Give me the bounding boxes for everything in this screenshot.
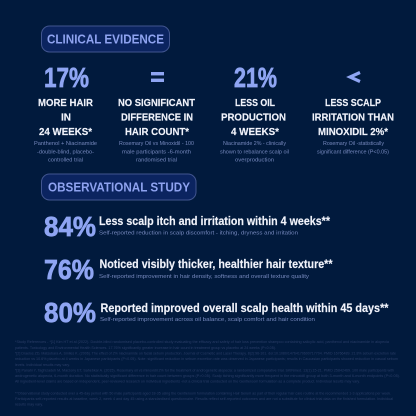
stat row: 84%: Self-reported reduction in scalp discomfort - itching, dryness and irritation xyxy=(99,231,298,237)
footnotes: study references xyxy=(15,340,400,406)
footnotes: study references: patients. Toxicology and Environmental Health Sciences. 17.76% significantly greater increase in hair count in treatment group vs placebo at 24 weeks (P<0.05). xyxy=(15,346,276,350)
stat: 21% less oil: LESS OIL xyxy=(235,98,275,109)
stat: equal hair count: HAIR COUNT* xyxy=(125,127,189,138)
footnotes: study references: Participants self-reported results at baseline, week 2, week 4 and day 45 using a standardised questionnaire. Results reflect self-reported outcomes and are not a substitute for clinical trial data on the finished formulation. Individual xyxy=(15,397,393,401)
heading badge: clinical evidence: CLINICAL EVIDENCE xyxy=(47,32,164,46)
footnotes: study references: *[2] Draelos ZD, Matsubara A, Smiles K. (2006). The effect of 2% niacinamide on facial sebum production. Journal of Cosmetic and Laser Therapy. 8(2):96-101. doi:10.1080/14764170600717704. PMID 16766489. 21.8% sebum excretion rate xyxy=(15,351,396,355)
footnotes: study references: *Study References - *[1] Kim HT et al (2022). Double-blind randomised placebo-controlled study evaluating the efficacy and safety of hair loss prevention shampoo containing salicylic acid, panthenol and niacinamide in alopecia xyxy=(15,340,389,344)
stat row: 80%: Reported improved overall scalp health within 45 days** xyxy=(100,302,389,315)
stat row: 84%: Less scalp itch and irritation within 4 weeks** xyxy=(99,215,330,228)
stat row: 76% xyxy=(44,254,333,285)
stat: 17% more hair: controlled trial xyxy=(48,158,83,164)
stat: 17% more hair: Panthenol + Niacinamide xyxy=(34,141,97,147)
stat row: 84%: 84% xyxy=(44,211,96,242)
stat: 17% more hair: -double-blind, placebo- xyxy=(37,149,94,155)
footnotes: study references: levels. Individual results may vary. xyxy=(15,363,70,367)
stat: less scalp irritation: IRRITATION THAN xyxy=(312,112,394,124)
stat row: 80% xyxy=(44,297,389,328)
stat: less scalp irritation: MINOXIDIL 2%* xyxy=(318,127,388,138)
stat: 17% more hair: 17% xyxy=(44,62,89,93)
heading badge: observational study xyxy=(42,174,196,200)
stat: equal hair count: DIFFERENCE IN xyxy=(121,112,193,124)
stat: equal hair count: randomised trial xyxy=(136,158,177,164)
stat: 21% less oil xyxy=(220,62,289,164)
footnotes: study references: androgenetic alopecia, 6-month duration. No statistically significant difference in hair count between groups (P>0.05). Scalp itching significantly more frequent in the minoxidil group at both 3-month and 6-month endpoints (P<0.05). xyxy=(15,374,400,378)
stat row: 76%: Self-reported improvement in hair density, softness and overall texture quality xyxy=(99,274,309,280)
stat: 21% less oil: Niacinamide 2% - clinically xyxy=(223,141,286,147)
footnotes: study references: All ingredient-level claims are based on independent, peer-reviewed research on individual ingredients -not a clinical trial conducted on the Gentleroom formulation as a complete product. Individual results may vary. xyxy=(15,380,360,384)
heading badge: clinical evidence xyxy=(42,26,170,52)
stat: less scalp irritation: Rosemary Oil -statistically xyxy=(323,141,384,147)
stat: less scalp irritation: significant difference (P<0.05) xyxy=(317,149,389,155)
stat: 17% more hair: MORE HAIR xyxy=(38,98,93,109)
stat: equal hair count: Rosemary Oil vs Minoxidil - 100 xyxy=(119,141,194,147)
footnotes: study references: *[3] Panahi Y, Taghizadeh M, Marzony ET, Sahebkar A. (2015). Rosemary oil vs minoxidil 2% for the treatment of androgenetic alopecia: a randomized comparative trial. SKINmed. 13(1):15-21. PMID 25842469. 100 male participants with xyxy=(15,368,394,372)
stat: equal hair count xyxy=(118,72,195,164)
footnotes: study references: results may vary. xyxy=(15,402,43,406)
footnotes: study references: **Observational study conducted over a 45-day period with 50 male participants aged 18-35 using the Gentleroom formulation containing Hair Serum as part of their regular hair care routine at the recommended 1-3 applications per week. xyxy=(15,392,391,396)
panel: clinical evidence xyxy=(34,26,394,164)
stat: 21% less oil: shown to rebalance scalp oil xyxy=(220,149,289,155)
stat: 21% less oil: 21% xyxy=(234,62,277,93)
stat: less scalp irritation: LESS SCALP xyxy=(325,98,381,109)
stat: equal hair count: NO SIGNIFICANT xyxy=(118,98,195,109)
panel: observational study xyxy=(42,174,389,328)
footnotes: study references: reduction vs 10.6% placebo at 4 weeks in Japanese participants (P<0.05). Note: significant reduction in sebum excretion rate was observed in Japanese participants; results in Caucasian participants showed reduction in casual sebum xyxy=(15,357,398,361)
stat: 17% more hair: 24 WEEKS* xyxy=(39,127,92,138)
stat row: 76%: Noticed visibly thicker, healthier hair texture** xyxy=(100,258,333,271)
stat: 21% less oil: PRODUCTION xyxy=(221,112,286,124)
stat: 17% more hair xyxy=(34,62,97,164)
stat: 21% less oil: overproduction xyxy=(235,158,274,164)
heading badge: observational study: OBSERVATIONAL STUDY xyxy=(48,181,191,195)
stat: 21% less oil: 4 WEEKS* xyxy=(231,127,279,138)
stat row: 76%: 76% xyxy=(44,254,94,285)
stat: equal hair count: male participants -6-month xyxy=(122,149,191,155)
stat row: 80%: Self-reported improvement across oil balance, scalp comfort and hair condition xyxy=(100,317,315,323)
stat: less scalp irritation xyxy=(312,72,394,155)
stat row: 84% xyxy=(44,211,330,242)
stat: 17% more hair: IN xyxy=(61,112,71,124)
stat row: 80%: 80% xyxy=(44,297,96,328)
